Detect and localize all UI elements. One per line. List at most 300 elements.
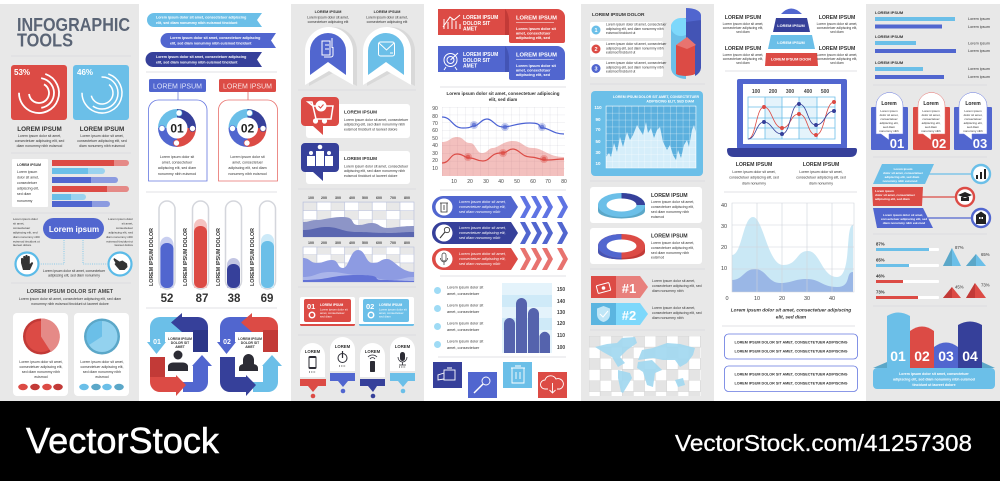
card 01: Lorem	[881, 101, 897, 107]
ring card 2: Lorem ipsum dolor sit amet,	[651, 241, 694, 245]
banner: blue: DOLOR SIT	[463, 58, 490, 64]
line chart: 70	[432, 121, 438, 127]
chart title: elit, sed diam	[489, 97, 517, 102]
arrow cycle 01: 01	[153, 339, 161, 346]
text box beside bars: sed diam	[17, 192, 31, 196]
panel: column 6 pyramid, laptop chart, area chart, boxes	[721, 8, 858, 392]
pin: microphone: LOREM	[395, 344, 411, 349]
line chart: 90	[432, 106, 438, 112]
gauge 52: LOREM IPSUM DOLOR	[149, 228, 155, 286]
laptop line chart	[727, 79, 857, 157]
footer band	[0, 401, 1000, 481]
bookmark captions: LOREM IPSUM	[374, 10, 400, 14]
laptop line chart: 400	[804, 89, 812, 95]
pyramid side notes: LOREM IPSUM	[819, 46, 855, 52]
3D cylinder chart	[671, 8, 701, 79]
ring captions: Lorem ipsum dolor sit amet,	[18, 134, 61, 138]
area chart 2: 500	[362, 241, 368, 245]
laptop line chart: 200	[769, 89, 777, 95]
pyramid side notes: sed diam	[830, 30, 844, 34]
panel: blue pie card: Lorem ipsum dolor sit amet,	[80, 360, 124, 364]
ring captions: consectetuer adipiscing elit, sed	[77, 139, 127, 143]
area chart 1: 600	[376, 196, 382, 200]
tag: graduation icon: dolor sit amet, consectetuer	[875, 193, 916, 197]
numbered list: 1	[594, 28, 598, 34]
pyramid side notes	[723, 15, 857, 65]
text box beside bars: LOREM IPSUM	[17, 163, 41, 167]
horizontal paired bars: LOREM IPSUM	[875, 34, 904, 39]
pyramid side notes: consectetuer adipiscing elit,	[723, 26, 763, 30]
ring card 1: consectetuer adipiscing elit,	[651, 205, 694, 209]
text box beside bars: Lorem ipsum	[17, 170, 37, 174]
side notes: adipiscing elit, sed	[108, 230, 133, 234]
banner: blue: AMET	[463, 64, 477, 70]
card 02: Lorem ipsum	[922, 109, 940, 113]
list heading: LOREM IPSUM DOLOR	[592, 12, 645, 18]
ring captions: LOREM IPSUM	[17, 126, 62, 133]
tag #2: Lorem ipsum dolor sit amet,	[652, 306, 695, 310]
donut card 02: LOREM IPSUM	[223, 84, 272, 90]
stat cards 01 02: sed diam	[379, 314, 391, 318]
pin: phone: LOREM	[305, 349, 321, 354]
panel: red pie card: consectetuer adipiscing elit,	[20, 365, 63, 369]
card 01: nonummy nibh	[879, 129, 899, 133]
numbered list: Lorem ipsum dolor sit amet, consectetuer	[606, 22, 667, 26]
panel: red pie card: Lorem ipsum dolor sit amet,	[19, 360, 63, 364]
gauge 87: LOREM IPSUM DOLOR	[183, 228, 189, 286]
red 53% ring card: 53%	[14, 68, 30, 77]
column chart 01 to 04: 01	[890, 348, 906, 364]
pyramid side notes: consectetuer adipiscing elit,	[817, 57, 857, 61]
blue 46% ring card	[73, 65, 129, 120]
callout: team: Lorem ipsum dolor sit amet, consectetuer	[344, 164, 409, 168]
ribbon: blue: elit, sed diam nonummy nibh euismod tincidunt	[170, 41, 252, 45]
horizontal paired bars: LOREM IPSUM	[875, 60, 904, 65]
tag #1	[591, 276, 702, 298]
text box 1: LOREM IPSUM DOLOR SIT AMET, CONSECTETUER ADIPISCING	[734, 350, 848, 354]
card 02: adipiscing elit,	[922, 121, 941, 125]
ring card 2: euismod	[651, 256, 664, 260]
hand caption	[43, 269, 106, 278]
stat cards 01 02: LOREM IPSUM	[379, 303, 403, 307]
arrow bar: key: sed diam nonummy nibh	[459, 236, 500, 240]
laptop captions: LOREM IPSUM	[803, 162, 839, 168]
panel: blue pie card: sed diam nonummy nibh	[83, 370, 121, 374]
card 02	[913, 92, 950, 151]
ring card 2: LOREM IPSUM	[651, 234, 688, 240]
ring captions	[15, 126, 127, 148]
bar chart: 130	[557, 310, 565, 316]
side notes: sit amet,	[13, 222, 25, 226]
callout: team	[301, 143, 410, 184]
ring card 2	[590, 228, 702, 264]
arrow bar: key: consectetuer adipiscing elit,	[459, 231, 506, 235]
callout: cart: Lorem ipsum dolor sit amet, consectetuer	[344, 118, 409, 122]
triangle charts: 45%	[955, 284, 964, 290]
line chart: 50	[514, 179, 520, 185]
section heading: Lorem ipsum dolor sit amet, consectetuer adipiscing elit, sed diam	[19, 297, 121, 301]
card 03: Lorem ipsum	[964, 109, 982, 113]
pin: remote	[360, 343, 385, 398]
tag #2: consectetuer adipiscing elit, sed	[652, 311, 702, 315]
pin: microphone	[390, 337, 415, 393]
donut card 02: nonummy nibh euismod	[228, 172, 267, 176]
section heading: nonummy nibh euismod tincidunt ut laoreet dolore	[31, 302, 109, 306]
tag: chart icon: Lorem ipsum	[894, 167, 913, 171]
blue panel jagged area chart: LOREM IPSUM DOLOR SIT AMET, CONSECTETUER	[613, 95, 699, 99]
ring captions: Lorem ipsum dolor sit amet,	[80, 134, 124, 138]
arrow bar: trash: sed diam nonummy nibh	[459, 210, 500, 214]
arrow bar: microphone: consectetuer adipiscing elit,	[459, 257, 506, 261]
ring captions: consectetuer adipiscing elit, sed	[15, 139, 64, 143]
pyramid side notes: consectetuer adipiscing elit,	[817, 26, 857, 30]
blue panel jagged area chart: 110	[594, 105, 602, 110]
tag #1: diam nonummy nibh	[652, 289, 684, 293]
tag #1: consectetuer adipiscing elit, sed	[652, 284, 702, 288]
gauge 87: 87	[196, 293, 208, 305]
column chart 01 to 04: tincidunt ut laoreet dolore	[912, 383, 956, 387]
ribbon: light blue	[147, 13, 262, 27]
ribbon: blue: Lorem ipsum dolor sit amet, consectetuer adipiscing	[170, 36, 260, 40]
numbered list: Lorem ipsum dolor sit amet, consectetuer	[606, 61, 667, 65]
pin: power	[330, 337, 355, 393]
horizontal paired bars: Lorem ipsum	[968, 17, 990, 21]
horizontal paired bars	[875, 10, 990, 79]
side notes	[13, 217, 133, 247]
line chart: 60	[432, 128, 438, 134]
numbered list: 3	[594, 66, 598, 72]
area chart 1: 300	[335, 196, 341, 200]
numbered list: adipiscing elit, sed diam nonummy nibh	[606, 46, 664, 50]
callout: cart: adipiscing elit, sed diam nonummy nibh	[344, 123, 405, 127]
title: TOOLS	[17, 30, 73, 50]
line chart: 40	[432, 143, 438, 149]
donut card 02: Lorem ipsum dolor sit	[230, 155, 265, 159]
text box beside bars: dolor sit amet,	[17, 176, 39, 180]
large area chart: 30	[721, 224, 727, 230]
pin: phone	[300, 343, 326, 398]
numbered list: euismod tincidunt ut	[606, 50, 635, 54]
side notes: euismod tincidunt ut	[106, 240, 133, 244]
arrow bar: key: Lorem ipsum dolor sit amet,	[459, 226, 506, 230]
bullet list: amet, consectetuer	[447, 310, 480, 314]
large area chart: 0	[725, 296, 729, 302]
ring card 2: consectetuer adipiscing elit,	[651, 246, 694, 250]
gauge 38: LOREM IPSUM DOLOR	[216, 228, 222, 286]
pin: remote: LOREM	[365, 349, 381, 354]
icon tile: camera	[433, 362, 462, 388]
ring card 1: sed diam nonummy nibh	[651, 210, 689, 214]
callout: cart	[301, 97, 410, 138]
arrow bar: microphone: sed diam nonummy nibh	[459, 262, 500, 266]
card 01: 01	[890, 136, 904, 151]
laptop captions: Lorem ipsum dolor sit amet,	[732, 170, 776, 174]
column chart 01 to 04: 03	[938, 348, 954, 364]
title	[17, 15, 130, 50]
section heading: LOREM IPSUM DOLOR SIT AMET	[27, 289, 114, 295]
gauge 87	[183, 201, 208, 305]
tag: bank icon: Lorem ipsum dolor sit amet,	[883, 213, 923, 217]
laptop captions: LOREM IPSUM	[736, 162, 772, 168]
large area chart: 20	[779, 296, 785, 302]
triangle charts: 73%	[981, 282, 990, 288]
pin: power: LOREM	[335, 344, 351, 349]
column chart 01 to 04	[873, 312, 995, 389]
donut card 01: LOREM IPSUM	[153, 84, 202, 90]
card 01: dolor sit amet,	[880, 113, 899, 117]
card 01: Lorem ipsum	[880, 109, 898, 113]
line chart: 70	[545, 179, 551, 185]
footer logo text: VectorStock	[26, 420, 220, 461]
tag: chart icon: dolor sit amet, consectetuer	[883, 171, 924, 175]
laptop captions: Lorem ipsum dolor sit amet,	[799, 170, 843, 174]
donut card 01: nonummy nibh euismod	[158, 172, 196, 176]
triangle charts: 87%	[955, 245, 964, 250]
horizontal bar chart	[52, 160, 129, 207]
banner: red: amet, consectetuer	[516, 32, 551, 36]
panel: red pie card: sed diam nonummy nibh	[22, 370, 60, 374]
arrow bar: trash: consectetuer adipiscing elit,	[459, 205, 506, 209]
large area chart: 40	[721, 203, 727, 209]
card 01	[871, 92, 908, 151]
bookmark: document icon	[305, 27, 357, 86]
area chart 2: 300	[335, 241, 341, 245]
arrow cycle 01	[147, 313, 212, 396]
area chart 2: 800	[404, 241, 410, 245]
area chart 2: 600	[376, 241, 382, 245]
panel: blue pie card	[74, 313, 129, 396]
horizontal paired bars: Lorem ipsum	[968, 75, 990, 79]
large area chart: 10	[754, 296, 760, 302]
laptop line chart: 500	[821, 89, 829, 95]
arrow bar: microphone: Lorem ipsum dolor sit amet,	[459, 252, 506, 256]
pyramid side notes: Lorem ipsum dolor sit amet,	[817, 22, 857, 26]
tag: chart icon	[873, 164, 990, 184]
pyramid side notes: sed diam	[736, 61, 750, 65]
chart title	[446, 91, 560, 102]
bookmark captions: Lorem ipsum dolor sit amet,	[366, 16, 408, 20]
footer reference number: VectorStock.com/41257308	[675, 430, 972, 456]
text box beside bars: consectetuer	[17, 181, 38, 185]
banner: red: adipiscing elit, sed	[516, 36, 551, 40]
banner: red: LOREM IPSUM	[516, 16, 557, 22]
pyramid side notes: sed diam	[830, 61, 844, 65]
laptop captions: consectetuer adipiscing elit, sed	[796, 176, 846, 180]
tag: chart icon: nonummy nibh euismod	[883, 179, 917, 183]
hand caption: adipiscing elit, sed diam nonummy	[48, 274, 100, 278]
progress bars: 87%	[876, 242, 885, 246]
banner: blue: Lorem ipsum dolor sit	[516, 64, 557, 68]
panel: red pie card	[13, 313, 68, 396]
tag: bank icon: consectetuer adipiscing elit, sed	[881, 217, 927, 221]
blue panel jagged area chart: 10	[595, 161, 601, 166]
bullet list: amet, consectetuer	[447, 292, 480, 296]
bar chart: 100	[557, 345, 565, 351]
red 53% ring card	[11, 65, 67, 120]
text box beside bars: nonummy	[17, 199, 33, 203]
laptop line chart: 300	[786, 89, 794, 95]
stat cards 01 02: Lorem ipsum dolor sit	[379, 308, 407, 312]
progress bars: 46%	[876, 274, 885, 278]
progress bars: 73%	[876, 290, 885, 294]
donut card 01	[148, 79, 207, 181]
area chart 1: 800	[404, 196, 410, 200]
side notes: euismod tincidunt ut	[13, 240, 40, 244]
line chart: 20	[467, 179, 473, 185]
card 02: sed diam	[925, 125, 938, 129]
pyramid: LOREM IPSUM	[777, 23, 805, 28]
side notes: Lorem ipsum dolor	[108, 217, 133, 221]
area chart 2	[303, 241, 414, 282]
panel: column 2 ribbons, donuts, gauges, arrows	[146, 13, 282, 396]
panel: column 1 infographic tools	[11, 15, 133, 396]
bullet list: amet, consectetuer	[447, 346, 480, 350]
gauge 69	[250, 201, 276, 305]
area chart 1	[303, 196, 414, 237]
panel: column 4 banners, line chart, arrows, bars, icons	[432, 9, 568, 398]
blue panel jagged area chart: 50	[595, 139, 601, 144]
line chart: 10	[451, 179, 457, 185]
side notes: diam nonummy nibh	[13, 235, 40, 239]
laptop captions: diam nonummy	[809, 182, 833, 186]
bullet list: Lorem ipsum dolor sit	[447, 304, 484, 308]
pyramid side notes: LOREM IPSUM	[819, 15, 855, 21]
panel: column 3 bookmarks, callouts, area charts, pins	[298, 10, 416, 398]
card 02: Lorem	[923, 101, 939, 107]
tag #1: Lorem ipsum dolor sit amet,	[652, 279, 695, 283]
tag: graduation icon: Lorem ipsum	[875, 189, 894, 193]
banner: red: DOLOR SIT	[463, 21, 490, 27]
line chart: 80	[432, 114, 438, 120]
line chart: 30	[432, 151, 438, 157]
large area chart: 30	[804, 296, 810, 302]
bookmark captions	[307, 10, 408, 24]
card 03: dolor sit amet,	[964, 113, 983, 117]
line chart: 20	[432, 158, 438, 164]
gauge 52	[149, 201, 175, 305]
arrow bar: trash	[432, 196, 568, 218]
banner: blue: amet, consectetuer	[516, 68, 551, 72]
pyramid side notes: Lorem ipsum dolor sit amet,	[723, 22, 763, 26]
side notes: sit amet,	[122, 222, 133, 226]
area chart caption: elit, sed diam	[776, 314, 807, 320]
ring captions: diam nonummy nibh euismod	[79, 144, 125, 148]
text box 2: LOREM IPSUM DOLOR SIT AMET, CONSECTETUER ADIPISCING	[734, 382, 848, 386]
ring card 1: LOREM IPSUM	[651, 193, 688, 199]
ribbon: light blue: elit, sed diam nonummy nibh euismod tincidunt	[156, 21, 238, 25]
bullet list: amet, consectetuer	[447, 328, 480, 332]
area chart 1: 100	[308, 196, 314, 200]
world map	[589, 336, 701, 396]
ring captions: diam nonummy nibh euismod	[17, 144, 62, 148]
ribbon: light blue: Lorem ipsum dolor sit amet, consectetuer adipiscing	[156, 16, 246, 20]
pyramid: LOREM IPSUM DOOR	[771, 56, 811, 62]
horizontal paired bars: Lorem ipsum	[968, 42, 990, 46]
bookmark captions: consectetuer adipiscing elit	[367, 20, 407, 24]
panel: blue pie card: consectetuer adipiscing elit,	[80, 365, 124, 369]
text box beside bars: adipiscing elit,	[17, 186, 39, 190]
banner: blue: adipiscing elit, sed	[516, 73, 551, 77]
blue panel jagged area chart: ADIPISCING ELIT, SED DIAM	[646, 100, 694, 104]
card 03: adipiscing elit,	[964, 121, 983, 125]
column chart 01 to 04: adipiscing elit, sed diam nonummy nibh euismod	[893, 378, 975, 382]
chart title: Lorem ipsum dolor sit amet, consectetuer adipiscing	[446, 91, 560, 96]
bar chart: 110	[557, 333, 565, 339]
panel: red pie card: euismod	[34, 375, 48, 379]
ring card 1: euismod	[651, 215, 664, 219]
side notes: adipiscing elit, sed	[13, 230, 38, 234]
pyramid side notes: sed diam	[736, 30, 750, 34]
pyramid side notes: consectetuer adipiscing elit,	[723, 57, 763, 61]
arrow cycle 02: AMET	[245, 345, 256, 349]
side notes: consectetuer	[116, 226, 133, 230]
column chart 01 to 04: 04	[962, 348, 978, 364]
arrow cycle 01: LOREM IPSUM	[168, 337, 192, 341]
area chart 2: 700	[390, 241, 396, 245]
stat cards 01 02: Lorem ipsum dolor sit	[320, 308, 348, 312]
pyramid side notes: LOREM IPSUM	[725, 46, 761, 52]
section heading	[19, 289, 121, 306]
horizontal paired bars: Lorem ipsum	[968, 49, 990, 53]
banner: blue	[438, 46, 565, 80]
stat cards 01 02: sed diam	[320, 314, 332, 318]
bookmark captions: LOREM IPSUM	[315, 10, 341, 14]
card 02: dolor sit amet,	[922, 113, 941, 117]
bookmark captions: Lorem ipsum dolor sit amet,	[307, 16, 349, 20]
card 03: Lorem	[965, 101, 981, 107]
line chart	[432, 106, 567, 185]
text box beside bars	[12, 159, 48, 207]
ring captions: LOREM IPSUM	[80, 126, 124, 133]
area chart 1: 500	[362, 196, 368, 200]
arrow cycle 02: LOREM IPSUM	[238, 337, 262, 341]
stat cards 01 02: amet, consectetuer	[379, 311, 404, 315]
side notes: laoreet dolore	[115, 243, 133, 247]
bar chart	[502, 283, 565, 353]
card 03: consectetuer	[964, 117, 982, 121]
banner: red	[438, 9, 565, 43]
numbered list: euismod tincidunt ut	[606, 31, 635, 35]
side notes: laoreet dolore	[13, 243, 32, 247]
numbered list: 2	[594, 47, 598, 53]
area chart 1: 700	[390, 196, 396, 200]
side notes: consectetuer	[13, 226, 30, 230]
triangle charts: 65%	[981, 252, 990, 257]
tag #2: diam nonummy nibh	[652, 316, 684, 320]
banner: red: AMET	[463, 26, 477, 32]
arrow bar: trash: Lorem ipsum dolor sit amet,	[459, 200, 506, 204]
area chart 2: 100	[308, 241, 314, 245]
title: INFOGRAPHIC	[17, 15, 130, 35]
numbered list: Lorem ipsum dolor sit amet, consectetuer	[606, 42, 667, 46]
arrow cycle 01: AMET	[175, 345, 186, 349]
area chart 1: 400	[349, 196, 355, 200]
arrow bar: microphone	[432, 248, 568, 270]
text box 2	[724, 366, 858, 392]
pyramid side notes: Lorem ipsum dolor sit amet,	[817, 53, 857, 57]
card 02: 02	[932, 136, 946, 151]
text box 1	[724, 334, 858, 359]
donut card 01: amet, consectetuer	[162, 160, 193, 164]
pyramid	[765, 8, 818, 66]
donut card 01: adipiscing elit, sed diam	[158, 166, 196, 170]
stat cards 01 02: 01	[307, 302, 315, 311]
ribbon: dark blue: elit, sed diam nonummy nibh euismod tincidunt	[156, 60, 238, 64]
numbered list: adipiscing elit, sed diam nonummy nibh	[606, 27, 664, 31]
stat cards 01 02	[300, 297, 414, 326]
card 02: consectetuer	[922, 117, 940, 121]
line chart: 50	[432, 136, 438, 142]
